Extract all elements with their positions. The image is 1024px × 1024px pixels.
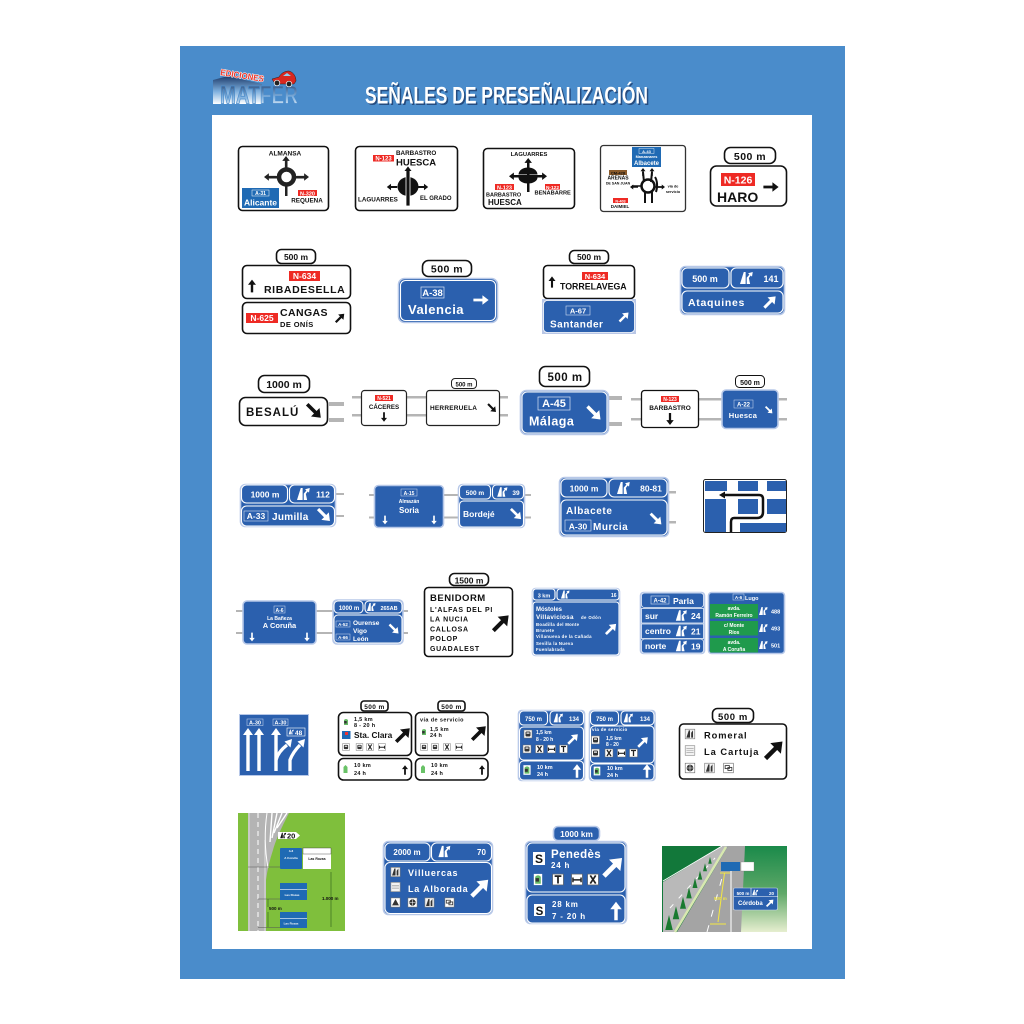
diagram: road plan with sign distances: 20 — [287, 832, 295, 840]
sign: N-126 Haro 500 m: 500 m — [734, 151, 766, 163]
sign: N-126 Haro 500 m: HARO — [717, 189, 758, 205]
sign: blue services exit 134: 750 m — [525, 717, 542, 723]
sign: Besalú gantry: 1000 m — [266, 379, 302, 391]
sign: Villuercas La Alborada exit 70: 70 — [477, 848, 486, 857]
sign: roundabout with service road: DE SAN JUAN — [606, 182, 631, 186]
sign: Penedès services 1000 km: 1000 km — [560, 829, 593, 839]
sign: Albacete Murcia exit 80-81: 1000 m — [570, 484, 599, 494]
sign: Penedès services 1000 km: 7 - 20 h — [552, 912, 586, 921]
sign: Lugo avenues in green: 501 — [771, 644, 780, 650]
diagram: road plan with sign distances — [238, 813, 345, 931]
sign: Parla sur centro norte: 19 — [691, 642, 701, 652]
sign: roundabout Huesca: LAGUARRES — [358, 196, 398, 204]
sign: A Coruña and Ourense gantry: A-66 — [338, 635, 348, 640]
sign: Benidorm list: 1500 m — [455, 576, 484, 586]
sign: blue services via de servicio exit 134 — [590, 710, 655, 780]
sign: Romeral La Cartuja: 500 m — [718, 712, 748, 723]
sign: Penedès services 1000 km: S — [535, 852, 543, 866]
sign: Albacete Murcia exit 80-81: Murcia — [593, 522, 628, 533]
sign: blue services exit 134: 24 h — [537, 772, 549, 778]
photo illustration: motorway with signs: 20 — [769, 891, 775, 896]
sign: Albacete Murcia exit 80-81: A-30 — [569, 522, 587, 532]
sign: services Sta. Clara: Sta. Clara — [354, 730, 393, 740]
sign: Villuercas La Alborada exit 70: 2000 m — [393, 848, 421, 857]
sign: Parla sur centro norte: 21 — [691, 626, 701, 636]
sign: services via de servicio: vía de servicio — [420, 718, 464, 724]
sign: roundabout with service road: Albacete — [634, 161, 660, 167]
sign: roundabout Huesca: N-123 — [375, 156, 392, 162]
sign: roundabout Barbastro: HUESCA — [488, 198, 522, 207]
sign: Parla sur centro norte: 24 — [691, 611, 701, 621]
sign: A-38 Valencia: 500 m — [431, 264, 463, 276]
sign: blue services via de servicio exit 134: 24 h — [607, 773, 619, 779]
sign: Torrelavega and Santander — [542, 250, 636, 334]
sign: Móstoles list exit 16: Villaviciosa — [536, 614, 574, 621]
sign: Ribadesella and Cangas de Onís: RIBADESELLA — [264, 284, 345, 296]
sign: blue services exit 134: 8 - 20 h — [536, 737, 553, 743]
sign: Romeral La Cartuja — [680, 708, 788, 779]
sign: roundabout Almansa: A-31 — [255, 191, 266, 197]
sign: Lugo avenues in green: A-6 — [735, 595, 743, 600]
sign: services via de servicio: 24 h — [431, 771, 444, 777]
sign: Barbastro and Huesca gantry: Huesca — [729, 411, 758, 420]
sign: Ribadesella and Cangas de Onís: N-634 — [293, 271, 316, 281]
sign: Benidorm list: CALLOSA — [430, 626, 469, 634]
sign: Soria and Bordejé gantry: Almazán — [399, 499, 419, 505]
sign: Besalú gantry — [240, 376, 344, 426]
sign: blue services via de servicio exit 134: 750 m — [596, 717, 613, 723]
logo: Ediciones Matfer: MATFER — [220, 82, 298, 110]
sign: A Coruña and Ourense gantry: 1000 m — [339, 606, 359, 612]
sign: Torrelavega and Santander: 500 m — [577, 252, 601, 262]
sign: Ataquines exit 141: 500 m — [692, 274, 718, 284]
title: SEÑALES DE PRESEÑALIZACIÓN — [365, 82, 648, 110]
sign: Ataquines exit 141 — [680, 266, 784, 314]
sign: Cáceres and Herreruela gantry — [352, 378, 508, 426]
logo: Ediciones Matfer — [213, 67, 298, 110]
sign: Soria and Bordejé gantry: A-15 — [404, 491, 415, 497]
title: SEÑALES DE PRESEÑALIZACIÓN — [366, 83, 650, 111]
sign: Lugo avenues in green: Ríos — [729, 630, 740, 636]
sign: services Sta. Clara: 500 m — [364, 704, 385, 711]
sign: roundabout Barbastro: LAGUARRES — [511, 152, 547, 158]
sign: Lugo avenues in green: c/ Monte — [724, 623, 744, 629]
sign: Penedès services 1000 km: Penedès — [551, 849, 601, 861]
sign: Lugo avenues in green: 493 — [771, 626, 780, 632]
diagram: road plan with sign distances: Las Rozas — [308, 857, 326, 861]
sign: blue services exit 134: 134 — [569, 717, 580, 723]
sign: Ribadesella and Cangas de Onís: 500 m — [284, 252, 308, 262]
sign: Jumilla exit 112: A-33 — [247, 511, 265, 521]
sign: Benidorm list: LA NUCIA — [430, 616, 469, 624]
title — [365, 82, 650, 111]
diagram: road plan with sign distances: Las Rozas — [284, 922, 299, 926]
sign: Parla sur centro norte — [640, 592, 704, 654]
sign: blue services exit 134: 10 km — [537, 765, 553, 771]
sign: A-38 Valencia: A-38 — [422, 288, 443, 299]
sign: Soria and Bordejé gantry: Bordejé — [463, 509, 495, 519]
sign: roundabout Huesca: EL GRADO — [420, 196, 452, 202]
sign: Móstoles list exit 16: 3 km — [538, 594, 550, 600]
sign: Besalú gantry: BESALÚ — [246, 406, 299, 419]
sign: Barbastro and Huesca gantry: BARBASTRO — [649, 405, 691, 412]
sign: Lugo avenues in green: avda. — [728, 606, 741, 612]
sign: Parla sur centro norte: Parla — [673, 596, 694, 606]
sign: Móstoles list exit 16: de Odón — [581, 615, 601, 620]
sign: blue services via de servicio exit 134: 8 - 20 — [606, 742, 619, 748]
sign: Benidorm list — [424, 574, 513, 656]
sign: Móstoles list exit 16: Móstoles — [536, 607, 563, 613]
photo illustration: motorway with signs: 500 m — [737, 891, 749, 896]
sign: Villuercas La Alborada exit 70: Villuercas — [408, 868, 458, 878]
sign: roundabout Barbastro: BARBASTRO — [486, 192, 522, 198]
sign: Ribadesella and Cangas de Onís — [242, 250, 350, 334]
sign: roundabout Almansa: N-320 — [300, 192, 315, 198]
sign: Benidorm list: BENIDORM — [430, 593, 486, 604]
sign: Lugo avenues in green: Lugo — [745, 596, 759, 602]
sign: roundabout with service road: CM-428 — [611, 170, 626, 175]
sign: A-45 Málaga gantry: Málaga — [529, 414, 575, 428]
sign: roundabout with service road: vía de — [668, 184, 678, 188]
photo illustration: motorway with signs: 500 m — [714, 896, 727, 901]
sign: Jumilla exit 112 — [240, 484, 344, 526]
sign: Móstoles list exit 16: Brunete — [536, 628, 555, 633]
sign: blue services exit 134: 1,5 km — [536, 730, 552, 736]
sign: Penedès services 1000 km — [526, 826, 628, 924]
sign: Cáceres and Herreruela gantry: HERRERUELA — [430, 405, 477, 412]
sign: roundabout Huesca: HUESCA — [396, 158, 436, 168]
sign: Villuercas La Alborada exit 70 — [384, 842, 493, 914]
sign: Barbastro and Huesca gantry: A-22 — [737, 402, 751, 408]
sign: N-126 Haro 500 m: N-126 — [724, 174, 752, 186]
sign: A-45 Málaga gantry: A-45 — [542, 398, 566, 410]
sign: Lugo avenues in green: avda. — [728, 640, 741, 646]
sign: Torrelavega and Santander: TORRELAVEGA — [560, 282, 627, 292]
sign: lane arrows A-30: 48 — [295, 730, 303, 737]
sign: lane arrows A-30: A-30 — [249, 720, 261, 726]
sign: Lugo avenues in green: 488 — [771, 610, 780, 616]
sign: services via de servicio: 24 h — [430, 733, 443, 739]
sign: Penedès services 1000 km: 24 h — [551, 861, 570, 870]
sign: Benidorm list: GUADALEST — [430, 646, 480, 653]
sign: A Coruña and Ourense gantry: La Bañeza — [267, 616, 292, 622]
diagram: road plan with sign distances: 1.000 m — [322, 896, 339, 901]
sign: Móstoles list exit 16: Sevilla la Nueva — [536, 641, 574, 646]
sign: roundabout with service road: A-43 — [642, 149, 652, 154]
sign: Barbastro and Huesca gantry — [631, 376, 787, 428]
sign: Benidorm list: L'ALFAS DEL PI — [430, 607, 493, 614]
sign: roundabout Almansa: REQUENA — [291, 198, 323, 204]
sign: roundabout with service road: ARENAS — [607, 176, 629, 182]
sign: services via de servicio: 1,5 km — [430, 727, 449, 733]
photo illustration: motorway with signs: Córdoba — [738, 901, 763, 907]
sign: Móstoles list exit 16: Villanueva de la Cañada — [536, 634, 592, 639]
sign: roundabout with service road: DAIMIEL — [611, 204, 630, 209]
sign: roundabout with service road: servicio — [666, 190, 681, 194]
sign: services Sta. Clara — [338, 701, 414, 780]
sign: blue services via de servicio exit 134: 1,5 km — [606, 736, 622, 742]
diagram: road plan with sign distances: Las Rozas — [285, 893, 300, 897]
sign: Móstoles list exit 16 — [532, 588, 620, 656]
sign: Ribadesella and Cangas de Onís: DE ONÍS — [280, 320, 314, 329]
white content panel — [212, 115, 812, 949]
sign: Soria and Bordejé gantry: 500 m — [466, 490, 484, 497]
sign: Torrelavega and Santander: A-67 — [570, 306, 586, 316]
diagram: road plan with sign distances: A Coruña — [284, 856, 298, 860]
sign: roundabout Huesca — [356, 146, 458, 210]
diagram: road plan with sign distances: A-6 — [289, 849, 294, 853]
sign: Ribadesella and Cangas de Onís: CANGAS — [280, 307, 328, 319]
sign: Móstoles list exit 16: Fuenlabrada — [536, 647, 565, 652]
sign: blue services via de servicio exit 134: vía de servicio — [592, 727, 628, 732]
sign: N-126 Haro 500 m — [710, 148, 786, 206]
sign: A-38 Valencia: Valencia — [408, 302, 464, 317]
sign: Jumilla exit 112: 112 — [316, 490, 330, 500]
sign: Cáceres and Herreruela gantry: CÁCERES — [369, 404, 399, 411]
blue page frame — [180, 46, 845, 979]
sign: Romeral La Cartuja: Romeral — [704, 730, 748, 740]
sign: roundabout with service road: N-403 — [615, 199, 626, 203]
sign: services via de servicio: 10 km — [431, 763, 448, 769]
sign: Benidorm list: POLOP — [430, 636, 458, 643]
sign: lane arrows A-30: A-30 — [275, 720, 286, 726]
sign: A Coruña and Ourense gantry: 265AB — [380, 606, 398, 612]
sign: services Sta. Clara: 8 - 20 h — [354, 723, 376, 729]
sign: Albacete Murcia exit 80-81: Albacete — [566, 506, 612, 517]
sign: Torrelavega and Santander: Santander — [550, 320, 603, 330]
sign: Ataquines exit 141: 141 — [763, 274, 779, 284]
sign: roundabout Almansa — [238, 146, 328, 210]
sign: Penedès services 1000 km: 28 km — [552, 900, 579, 909]
sign: Soria and Bordejé gantry — [369, 484, 531, 528]
sign: roundabout Barbastro: BENABARRE — [534, 190, 571, 196]
sign: services Sta. Clara: 24 h — [354, 771, 367, 777]
sign: roundabout with service road — [600, 146, 686, 212]
sign: A-38 Valencia — [398, 260, 498, 322]
sign: Albacete Murcia exit 80-81: 80-81 — [640, 484, 662, 494]
sign: Parla sur centro norte: A-42 — [653, 598, 667, 604]
sign: roundabout Barbastro — [484, 148, 574, 208]
sign: roundabout Almansa: Alicante — [244, 198, 277, 208]
sign: Parla sur centro norte: sur — [645, 611, 659, 621]
sign: Soria and Bordejé gantry: Soria — [399, 506, 420, 515]
sign: A Coruña and Ourense gantry: Vigo — [353, 628, 367, 635]
sign: Ribadesella and Cangas de Onís: N-625 — [250, 313, 274, 323]
sign: services Sta. Clara: 1,5 km — [354, 717, 373, 723]
logo: Ediciones Matfer: EDICIONES — [220, 67, 265, 84]
sign: blue services exit 134 — [518, 710, 584, 780]
sign: Móstoles list exit 16: Boadilla del Monte — [536, 622, 580, 627]
sign: blue services via de servicio exit 134: 134 — [640, 717, 651, 723]
sign: A Coruña and Ourense gantry: A-6 — [275, 608, 284, 614]
sign: services Sta. Clara: 10 km — [354, 763, 371, 769]
sign: Lugo avenues in green: A Coruña — [723, 647, 745, 653]
sign: Barbastro and Huesca gantry: 500 m — [740, 380, 760, 387]
sign: A Coruña and Ourense gantry: León — [353, 636, 369, 643]
sign: A Coruña and Ourense gantry: A Coruña — [263, 621, 297, 630]
sign: A Coruña and Ourense gantry — [236, 600, 408, 644]
sign: Ataquines exit 141: Ataquines — [688, 297, 745, 309]
sign: Jumilla exit 112: Jumilla — [272, 512, 309, 523]
sign: Lugo avenues in green: Ramón Ferreiro — [715, 613, 753, 619]
sign: Jumilla exit 112: 1000 m — [251, 490, 280, 500]
sign: A Coruña and Ourense gantry: Ourense — [353, 620, 380, 627]
sign: A-45 Málaga gantry: 500 m — [547, 372, 583, 384]
sign: Penedès services 1000 km: S — [536, 906, 544, 918]
sign: blue services via de servicio exit 134: 10 km — [607, 766, 623, 772]
sign: roundabout Barbastro: N-123 — [497, 186, 512, 192]
sign: roundabout Barbastro: N-122 — [546, 185, 559, 191]
sign: Parla sur centro norte: centro — [645, 626, 671, 636]
sign: Torrelavega and Santander: N-634 — [585, 272, 606, 281]
sign: Lugo avenues in green — [708, 592, 784, 654]
sign: Parla sur centro norte: norte — [645, 641, 667, 651]
sign: services via de servicio: 500 m — [441, 704, 462, 711]
sign: lane arrows A-30 — [240, 714, 308, 776]
sign: Romeral La Cartuja: La Cartuja — [704, 747, 759, 757]
sign: services via de servicio — [416, 701, 490, 780]
sign: road layout diagram — [704, 480, 786, 532]
sign: A-45 Málaga gantry — [520, 366, 622, 434]
sign: Cáceres and Herreruela gantry: 500 m — [455, 382, 473, 388]
sign: roundabout Almansa: ALMANSA — [269, 150, 302, 158]
sign: Villuercas La Alborada exit 70: La Alborada — [408, 884, 469, 894]
sign: roundabout with service road: Manzanares — [636, 155, 657, 159]
sign: Móstoles list exit 16: 16 — [611, 593, 617, 599]
sign: Albacete Murcia exit 80-81 — [560, 478, 676, 536]
diagram: road plan with sign distances: 500 m — [269, 906, 282, 911]
sign: Barbastro and Huesca gantry: N-123 — [663, 397, 677, 403]
sign: Soria and Bordejé gantry: 39 — [512, 490, 520, 497]
sign: Cáceres and Herreruela gantry: N-521 — [377, 396, 391, 402]
photo illustration: motorway with signs — [662, 846, 787, 932]
sign: A Coruña and Ourense gantry: A-52 — [338, 622, 348, 627]
sign: roundabout Huesca: BARBASTRO — [396, 150, 436, 157]
